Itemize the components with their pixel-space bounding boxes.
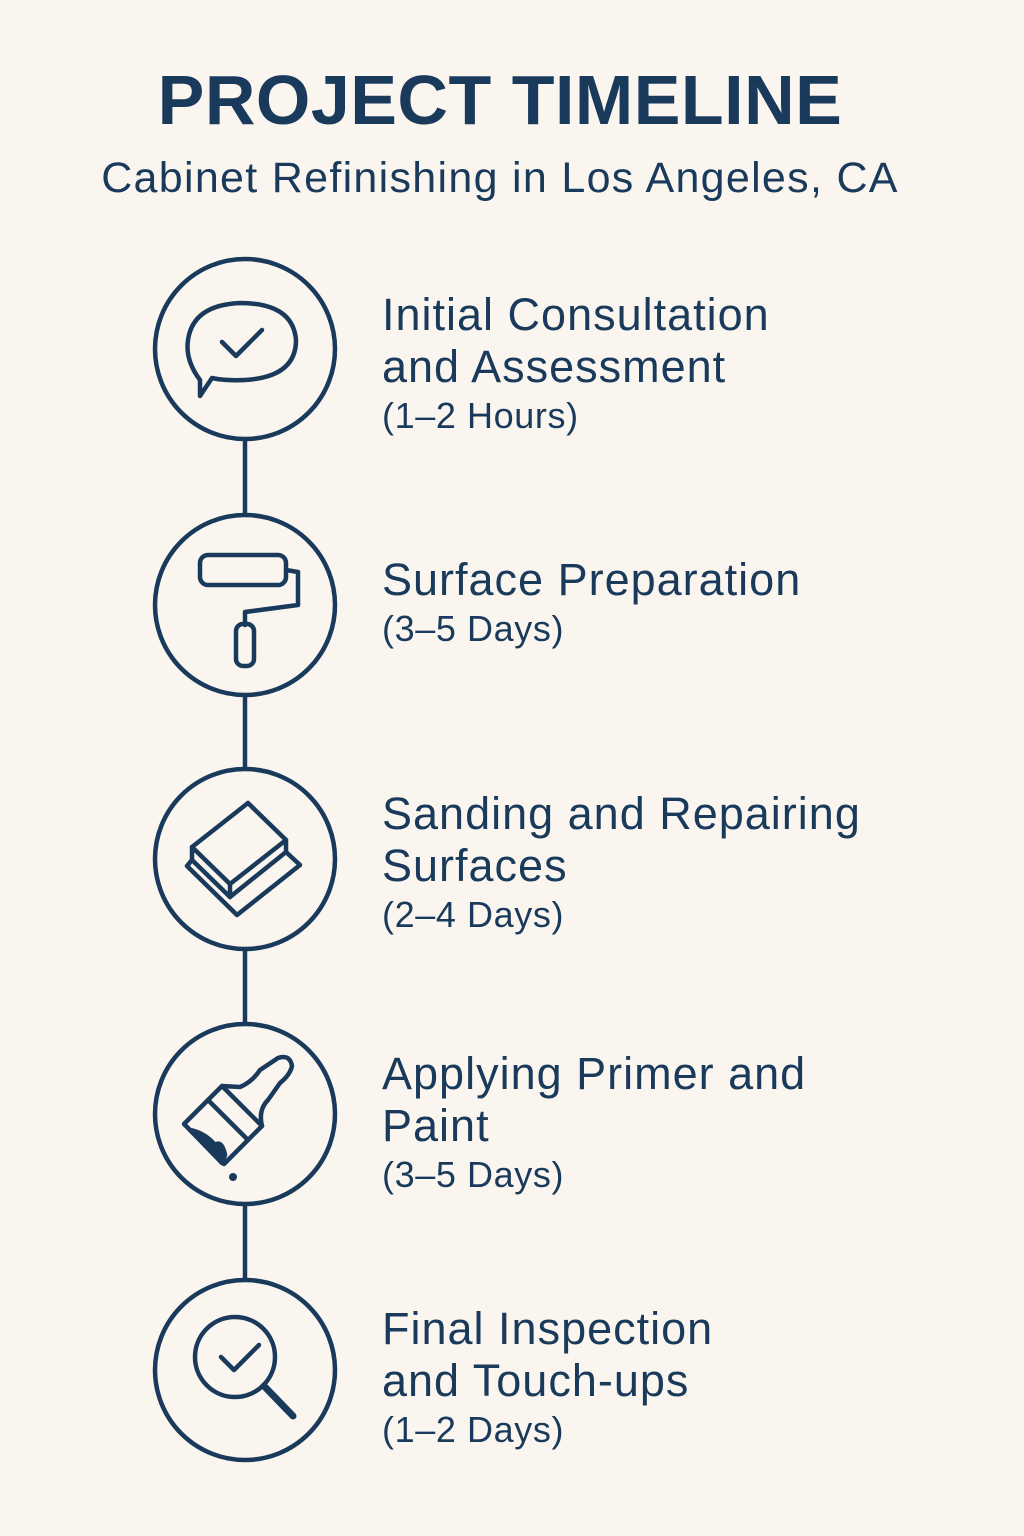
- step 5 text: Final Inspection: [382, 1303, 713, 1354]
- step 3 text: Surfaces: [382, 840, 568, 891]
- step 2 text: [382, 554, 801, 649]
- step 4 text: [382, 1048, 806, 1195]
- step 3 text: [382, 788, 861, 935]
- step 2 text: Surface Preparation: [382, 554, 801, 605]
- step 2 text: (3–5 Days): [382, 608, 564, 649]
- step 5 text: [382, 1303, 713, 1450]
- step 1 text: Initial Consultation: [382, 289, 770, 340]
- icon: magnifier check: [155, 1280, 335, 1460]
- icon: roller: [155, 515, 335, 695]
- step 1 text: [382, 289, 770, 436]
- title: PROJECT TIMELINE: [158, 61, 842, 139]
- step 4 text: (3–5 Days): [382, 1154, 564, 1195]
- icon: chat check: [155, 259, 335, 439]
- step 1 text: and Assessment: [382, 341, 726, 392]
- subtitle: Cabinet Refinishing in Los Angeles, CA: [101, 154, 899, 202]
- step 5 text: and Touch-ups: [382, 1355, 689, 1406]
- step 3 text: (2–4 Days): [382, 894, 564, 935]
- step 4 text: Paint: [382, 1100, 490, 1151]
- step 5 text: (1–2 Days): [382, 1409, 564, 1450]
- step 4 text: Applying Primer and: [382, 1048, 806, 1099]
- step 1 text: (1–2 Hours): [382, 395, 579, 436]
- icon: sanding block: [155, 769, 335, 949]
- step 3 text: Sanding and Repairing: [382, 788, 861, 839]
- icon: paint brush: [155, 1024, 335, 1204]
